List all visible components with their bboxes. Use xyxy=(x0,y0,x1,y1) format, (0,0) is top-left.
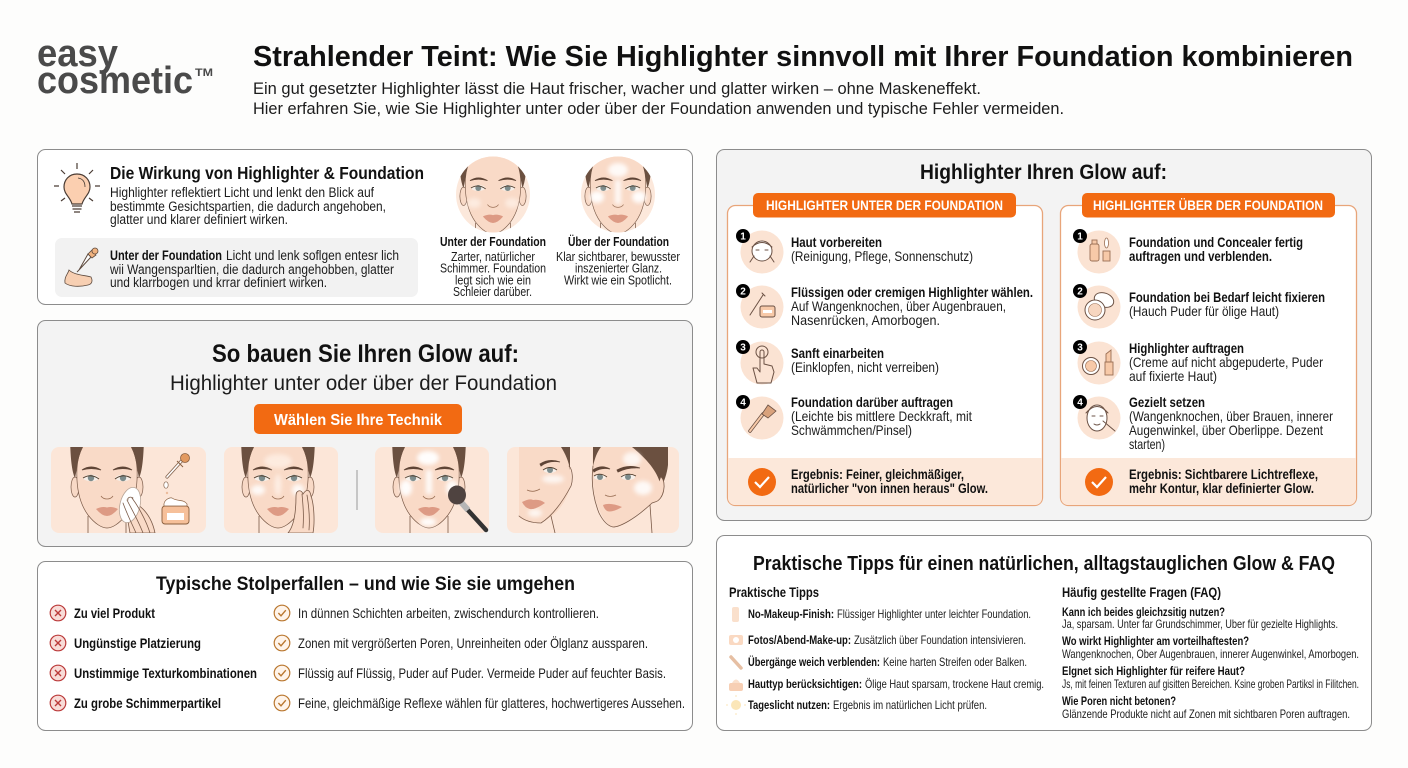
step 1: Foundation und Concealer fertig xyxy=(1129,234,1303,250)
illustration: brush application xyxy=(375,447,489,533)
title: Strahlender Teint: Wie Sie Highlighter sinnvoll mit Ihrer Foundation kombinieren xyxy=(253,41,1353,73)
tip 3: Übergänge weich verblenden: xyxy=(748,654,880,669)
tab label xyxy=(753,193,1016,218)
column: unter der Foundation xyxy=(728,193,1042,506)
step 3: 3 xyxy=(1077,342,1083,354)
tips list xyxy=(726,584,1044,715)
caption: über der Foundation: Über der Foundation xyxy=(568,234,669,249)
panel: Wirkung xyxy=(38,144,692,304)
heading: Praktische Tipps für einen natürlichen, alltagstauglichen Glow & FAQ xyxy=(753,553,1335,575)
caption: über der Foundation: inszenierter Glanz. xyxy=(575,262,662,276)
tip 5: Tageslicht nutzen: xyxy=(748,698,830,712)
button: Wählen Sie Ihre Technik xyxy=(274,412,442,429)
question 3: Elgnet sich Highlighter für reifere Haut? xyxy=(1062,664,1245,678)
callout: unter der Foundation: Unter der Foundation xyxy=(110,248,222,263)
FAQ list xyxy=(1062,584,1359,721)
subtitle xyxy=(253,79,1064,118)
step 4: starten) xyxy=(1129,436,1165,452)
tip 1 xyxy=(732,607,1031,622)
step 4: (Leichte bis mittlere Deckkraft, mit xyxy=(791,408,972,424)
left face xyxy=(519,447,571,523)
question 4 xyxy=(1062,694,1350,721)
description: Highlighter reflektiert Licht und lenkt den Blick auf xyxy=(110,185,374,200)
caption: unter der Foundation: Unter der Foundation xyxy=(440,235,546,249)
step 4: Schwämmchen/Pinsel) xyxy=(791,422,912,438)
step 4: Gezielt setzen xyxy=(1129,394,1205,410)
tip 1: No-Makeup-Finish: xyxy=(748,607,834,621)
question 2: Wo wirkt Highlighter am vorteilhaftesten? xyxy=(1062,634,1249,648)
step 3: (Creme auf nicht abgepuderte, Puder xyxy=(1129,354,1323,370)
tip 5: Ergebnis im natürlichen Licht prüfen. xyxy=(833,698,987,712)
row 1: Zu viel Produkt xyxy=(74,605,155,621)
step 1 xyxy=(1073,229,1303,274)
heading: Highlighter Ihren Glow auf: xyxy=(920,160,1167,184)
result: mehr Kontur, klar definierter Glow. xyxy=(1129,480,1314,496)
row 2: Zonen mit vergrößerten Poren, Unreinheiten oder Ölglanz aussparen. xyxy=(298,634,648,651)
step 3: Highlighter auftragen xyxy=(1129,340,1244,356)
illustration: face under foundation xyxy=(456,156,530,232)
illustration: side views xyxy=(507,447,679,533)
subheading: Highlighter unter oder über der Foundation xyxy=(170,372,557,395)
step 1: 1 xyxy=(1077,232,1083,242)
step 4: Augenwinkel, über Oberlippe. Dezent xyxy=(1129,422,1323,438)
row 4: Zu grobe Schimmerpartikel xyxy=(74,695,221,711)
row 2: Ungünstige Platzierung xyxy=(74,635,201,651)
panel: Stolperfallen xyxy=(38,562,692,730)
panel: Anleitung xyxy=(716,150,1372,520)
step 3: auf fixierte Haut) xyxy=(1129,368,1217,384)
question 1: Kann ich beides gleichzsitig nutzen? xyxy=(1062,605,1225,619)
caption: unter der Foundation xyxy=(440,235,546,299)
step 4: Foundation darüber auftragen xyxy=(791,394,953,410)
panel heading: Die Wirkung von Highlighter & Foundation xyxy=(110,163,424,183)
tips list: Praktische Tipps xyxy=(729,584,819,600)
result xyxy=(748,466,988,496)
right face xyxy=(592,447,664,527)
step 1: 1 xyxy=(740,232,746,242)
tab label: HIGHLIGHTER ÜBER DER FOUNDATION xyxy=(1093,197,1323,213)
question 4: Wie Poren nicht betonen? xyxy=(1062,694,1176,708)
step 4: (Wangenknochen, über Brauen, innerer xyxy=(1129,408,1333,424)
question 1 xyxy=(1062,605,1338,631)
result: Ergebnis: Feiner, gleichmäßiger, xyxy=(791,466,964,482)
panel: Tipps und FAQ xyxy=(716,536,1372,730)
FAQ list: Häufig gestellte Fragen (FAQ) xyxy=(1062,584,1221,600)
tab label: HIGHLIGHTER UNTER DER FOUNDATION xyxy=(766,197,1003,213)
tip 4: Hauttyp berücksichtigen: xyxy=(748,677,862,691)
step 2: Auf Wangenknochen, über Augenbrauen, xyxy=(791,298,1006,314)
row 3: Flüssig auf Flüssig, Puder auf Puder. Vermeide Puder auf feuchter Basis. xyxy=(298,665,666,681)
heading: So bauen Sie Ihren Glow auf: xyxy=(212,340,519,368)
callout: unter der Foundation: wii Wangensparltien, die dadurch angehobben, glatter xyxy=(109,262,394,277)
caption: unter der Foundation: Schimmer. Foundation xyxy=(440,262,546,276)
result: natürlicher "von innen heraus" Glow. xyxy=(791,480,988,496)
result xyxy=(1085,466,1318,496)
step 2 xyxy=(736,284,1033,328)
step 2: Nasenrücken, Amorbogen. xyxy=(791,312,940,328)
caption: über der Foundation xyxy=(556,234,680,288)
step 1: (Reinigung, Pflege, Sonnenschutz) xyxy=(791,248,973,264)
question 2 xyxy=(1062,634,1359,661)
step 1: auftragen und verblenden. xyxy=(1129,248,1272,264)
icon: light bulb xyxy=(54,163,100,212)
step 2: 2 xyxy=(740,286,746,298)
description: glatter und klarer definiert wirken. xyxy=(110,212,288,227)
step 4: 4 xyxy=(1077,398,1083,408)
step 2: 2 xyxy=(1077,286,1083,298)
illustration: face over foundation xyxy=(581,156,655,232)
step 2: Foundation bei Bedarf leicht fixieren xyxy=(1129,289,1325,305)
tip 4 xyxy=(729,677,1044,691)
logo: TM xyxy=(195,67,213,79)
subtitle: Hier erfahren Sie, wie Sie Highlighter unter oder über der Foundation anwenden und typische Fehler vermeiden. xyxy=(253,99,1064,118)
column: über der Foundation xyxy=(1060,193,1356,506)
step 4 xyxy=(1073,394,1333,452)
step 4: 4 xyxy=(740,398,746,408)
step 3: 3 xyxy=(740,342,746,354)
tip 5 xyxy=(726,695,987,715)
caption: über der Foundation: Klar sichtbarer, bewusster xyxy=(556,250,680,264)
step 4 xyxy=(736,394,972,440)
illustration: patting in xyxy=(224,447,338,533)
row 3: Unstimmige Texturkombinationen xyxy=(74,665,257,681)
result: Ergebnis: Sichtbarere Lichtreflexe, xyxy=(1129,466,1318,482)
logo xyxy=(37,33,213,102)
tip 3 xyxy=(731,654,1027,669)
row 4 xyxy=(50,695,685,711)
caption: unter der Foundation: Zarter, natürlicher xyxy=(451,250,535,264)
caption: unter der Foundation: legt sich wie ein xyxy=(455,274,531,288)
step 3 xyxy=(736,340,939,384)
row 2 xyxy=(50,634,648,651)
step 3: (Einklopfen, nicht verreiben) xyxy=(791,359,939,375)
step 3: Sanft einarbeiten xyxy=(791,345,884,361)
callout: unter der Foundation xyxy=(55,238,418,297)
step 1 xyxy=(736,229,973,274)
tip 2: Zusätzlich über Foundation intensivieren. xyxy=(854,633,1026,647)
step 3 xyxy=(1073,340,1323,384)
tip 2: Fotos/Abend-Make-up: xyxy=(748,633,851,647)
icon: dropper and cream xyxy=(65,248,98,286)
button xyxy=(254,404,462,434)
row 1: In dünnen Schichten arbeiten, zwischendurch kontrollieren. xyxy=(298,605,599,621)
step 2: (Hauch Puder für ölige Haut) xyxy=(1129,303,1279,319)
question 3 xyxy=(1062,664,1359,691)
row 4: Feine, gleichmäßige Reflexe wählen für glatteres, hochwertigeres Aussehen. xyxy=(298,695,685,711)
logo: easy xyxy=(37,33,118,75)
callout: unter der Foundation: Licht und lenk soflgen entesr lich xyxy=(226,248,399,263)
panel: Glow aufbauen xyxy=(38,320,692,546)
subtitle: Ein gut gesetzter Highlighter lässt die Haut frischer, wacher und glatter wirken – ohne Maskeneffekt. xyxy=(253,79,981,98)
description: bestimmte Gesichtspartien, die dadurch angehoben, xyxy=(110,199,386,214)
step 2: Flüssigen oder cremigen Highlighter wählen. xyxy=(791,284,1033,300)
caption: über der Foundation: Wirkt wie ein Spotlicht. xyxy=(564,274,672,288)
step 2 xyxy=(1073,284,1325,328)
tip 3: Keine harten Streifen oder Balken. xyxy=(883,655,1027,669)
callout: unter der Foundation: und klarrbogen und krrar definiert wirken. xyxy=(110,275,327,290)
tip 1: Flüssiger Highlighter unter leichter Foundation. xyxy=(837,607,1031,621)
heading: Typische Stolperfallen – und wie Sie sie umgehen xyxy=(156,573,575,595)
tip 2 xyxy=(729,633,1026,647)
logo: cosmetic xyxy=(37,60,193,102)
row 3 xyxy=(50,665,666,681)
divider between tiles xyxy=(356,470,358,510)
step 1: Haut vorbereiten xyxy=(791,234,882,250)
tip 4: Ölige Haut sparsam, trockene Haut cremig. xyxy=(865,677,1044,691)
description xyxy=(110,185,386,227)
row 1 xyxy=(50,605,599,621)
illustration: cleansing and products xyxy=(51,447,206,533)
caption: unter der Foundation: Schleier darüber. xyxy=(453,285,532,299)
tab label xyxy=(1082,193,1335,218)
